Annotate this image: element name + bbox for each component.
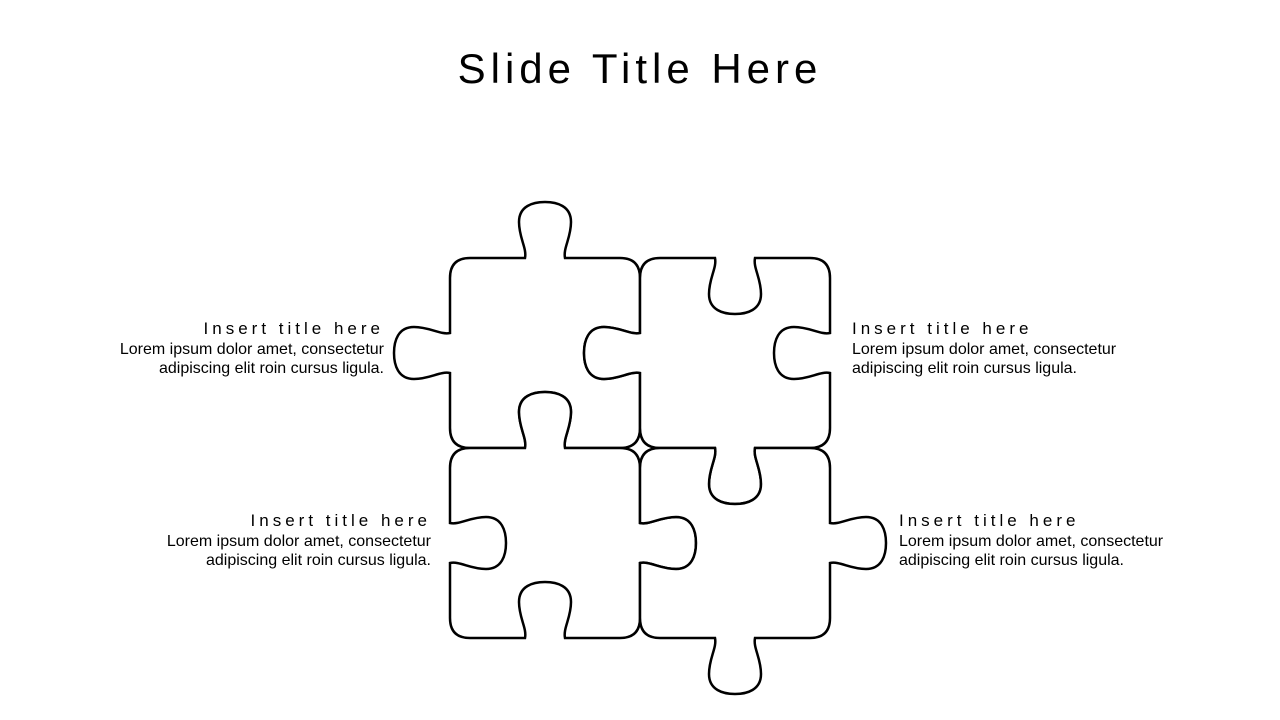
text block: bottom right: adipiscing elit roin cursus ligula. — [899, 552, 1124, 569]
text block: top right: adipiscing elit roin cursus ligula. — [852, 360, 1077, 377]
text block: top right: Insert title here — [852, 319, 1032, 338]
text block: bottom left: adipiscing elit roin cursus ligula. — [206, 552, 431, 569]
puzzle piece: top left — [394, 202, 640, 448]
puzzle piece: bottom right — [640, 448, 886, 694]
text block: bottom right: Lorem ipsum dolor amet, consectetur — [899, 533, 1163, 550]
text block: bottom right: Insert title here — [899, 511, 1079, 530]
title: Slide Title Here — [458, 45, 822, 92]
text block: top left: adipiscing elit roin cursus ligula. — [159, 360, 384, 377]
puzzle piece: top right — [584, 258, 830, 504]
text block: bottom left: Insert title here — [251, 511, 431, 530]
text block: top left: Insert title here — [204, 319, 384, 338]
text block: bottom left — [167, 511, 431, 569]
puzzle piece: bottom left — [450, 392, 696, 638]
text block: bottom right — [899, 511, 1163, 569]
text block: top left — [120, 319, 384, 377]
text block: top right — [852, 319, 1116, 377]
text block: top left: Lorem ipsum dolor amet, consectetur — [120, 341, 384, 358]
text block: bottom left: Lorem ipsum dolor amet, consectetur — [167, 533, 431, 550]
text block: top right: Lorem ipsum dolor amet, consectetur — [852, 341, 1116, 358]
